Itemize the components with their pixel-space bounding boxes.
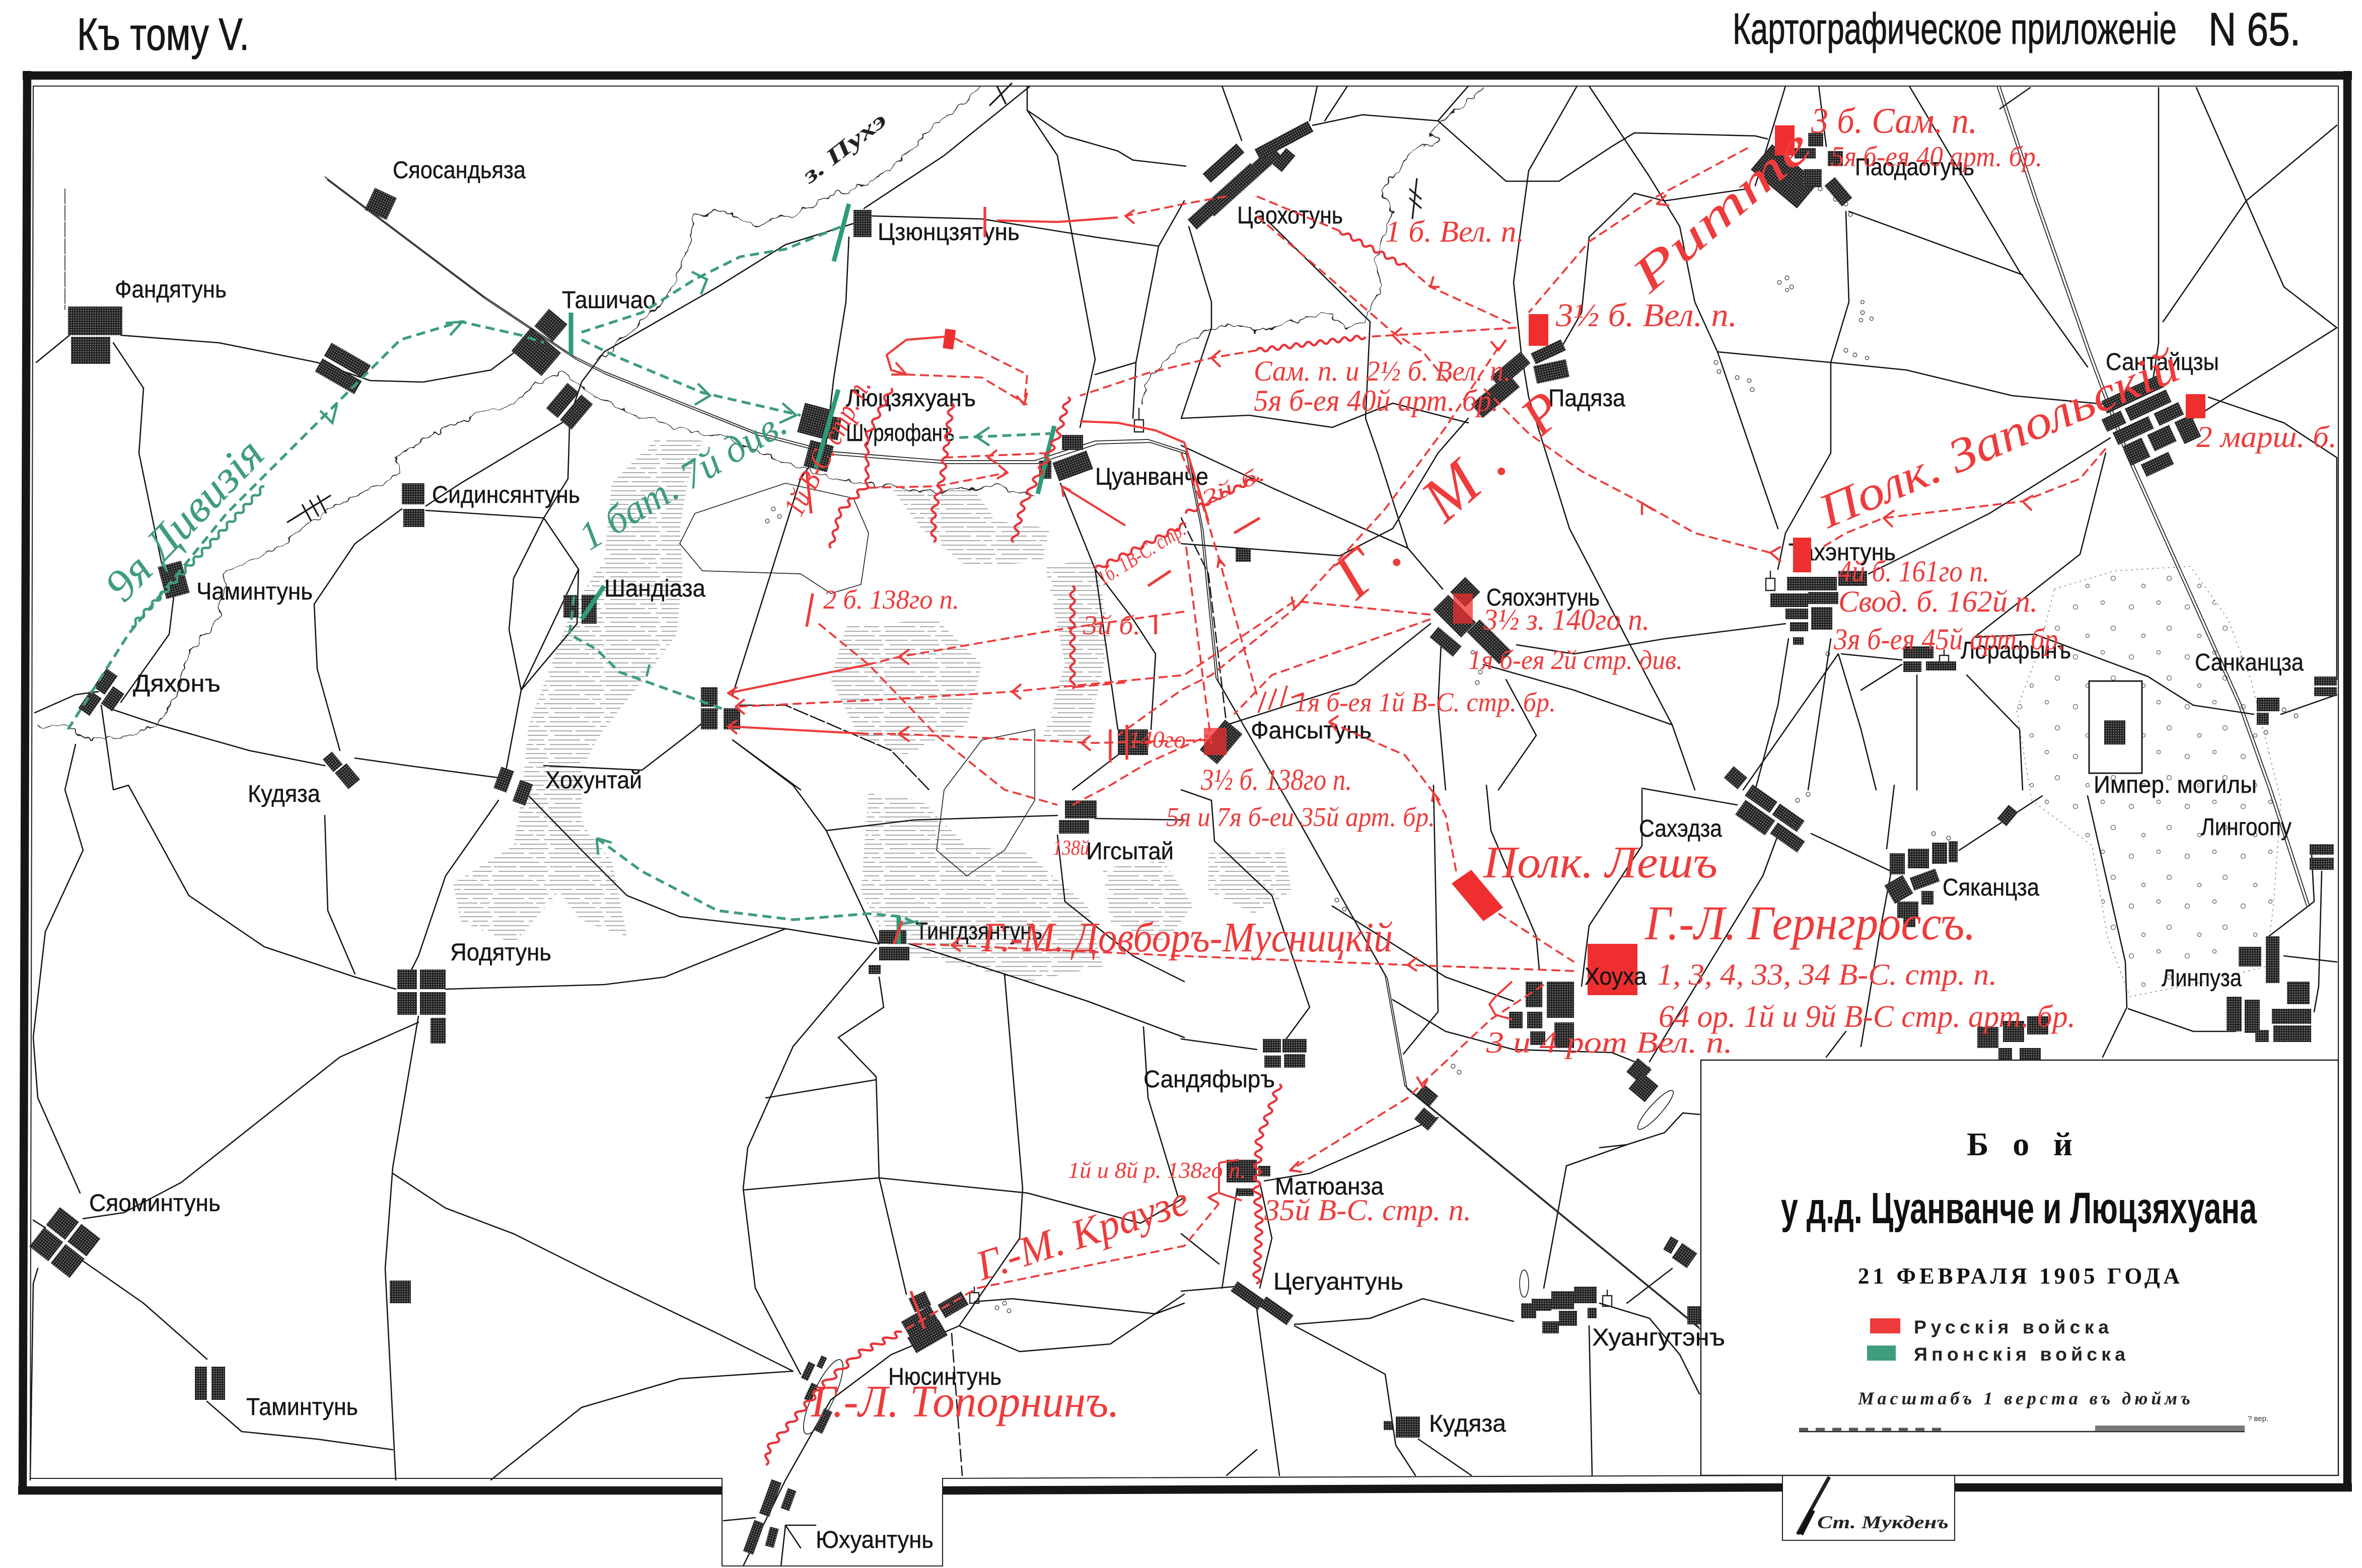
label: 1st battery 1st rifle: 1я б-ея 1й В-С. стр. бр. bbox=[1295, 687, 1556, 717]
label: 2 march bn: 2 марш. б. bbox=[2196, 420, 2337, 454]
village: Линпуза group bbox=[2227, 936, 2311, 1042]
label: 140 at hamlet: 140го bbox=[1128, 726, 1186, 753]
village: Кудяза south bbox=[1384, 1416, 1420, 1438]
japanese retreat: Хохунтай bbox=[597, 838, 921, 926]
legend swatch: russian bbox=[1870, 1318, 1900, 1333]
label: general: first part: Г. М. bbox=[1319, 425, 1520, 612]
label: col. Lesh: Полк. Лешъ bbox=[1483, 838, 1717, 887]
hill hachures bbox=[453, 438, 1292, 982]
village: Сантайцзы bbox=[2095, 369, 2207, 484]
label: 1 bn Velikoluzhsky: 1 б. Вел. п. bbox=[1385, 215, 1524, 248]
place name: Сандяфыръ bbox=[1143, 1066, 1275, 1093]
place name: Сантайцзы bbox=[2106, 349, 2219, 376]
place name: Линпуза bbox=[2162, 965, 2242, 992]
label: 3rd battery 45 art: 3я б-ея 45й арт. бр. bbox=[1833, 623, 2065, 656]
label: col. Zapolsky: Полк. Запольскій bbox=[1810, 338, 2186, 539]
village: Нюсинтунь bbox=[801, 1291, 969, 1434]
village: Цаохотунь bbox=[1188, 121, 1314, 230]
place name: Цаохотунь bbox=[1237, 202, 1343, 229]
village: central west bbox=[701, 687, 740, 729]
village: east of Сахэдза bbox=[1733, 784, 1815, 856]
japanese troop movements bbox=[68, 204, 1054, 944]
legend text: russian: Русскія войска bbox=[1914, 1316, 2109, 1337]
place name overlapping legend edge: Хуангутэнъ bbox=[1592, 1324, 1725, 1351]
village: Сяоминтунь bbox=[29, 1207, 100, 1278]
place name: Цегуантунь bbox=[1273, 1268, 1403, 1295]
lakes bbox=[680, 483, 1677, 1438]
place name: Юхуантунь bbox=[816, 1527, 934, 1553]
place name: Падяза bbox=[1548, 385, 1625, 412]
japanese advance: Цуанванче to Люцзяхуанъ bbox=[952, 433, 1054, 438]
village: Цегуантунь bbox=[1231, 1281, 1294, 1325]
village: Паодаотунь bbox=[1751, 133, 1852, 208]
place name: Тингдзянтунь bbox=[915, 918, 1042, 945]
label: gen. Krauze: Г.-М. Краузе bbox=[970, 1177, 1194, 1290]
place name: Санканцза bbox=[2195, 649, 2304, 676]
scattered tree marks bbox=[765, 187, 2298, 1313]
place name: Матюанза bbox=[1275, 1173, 1384, 1200]
village: Цзюнцзятунь bbox=[853, 210, 872, 237]
village: Сидинсянтунь bbox=[402, 483, 424, 527]
japanese advance: wavy line of 9th division bbox=[131, 486, 264, 627]
place name: Сидинсянтунь bbox=[432, 482, 580, 508]
legend swatch: japanese bbox=[1867, 1346, 1896, 1361]
village: Лорафынъ bbox=[1903, 646, 1956, 672]
icon: river flow arrows bbox=[287, 83, 1421, 522]
place name: Лингоопу bbox=[2201, 814, 2292, 841]
place name: Импер. могилы bbox=[2094, 772, 2257, 798]
russian troop movements bbox=[728, 101, 2337, 1465]
label: 35th rifle regiment: 35й В-С. стр. п. bbox=[1264, 1193, 1471, 1227]
place name: Кудяза bbox=[248, 781, 320, 807]
village: crossroads south of Ташичао bbox=[546, 383, 593, 429]
japanese line bars bbox=[571, 204, 1054, 944]
label: 138 at Игсытай: 138й bbox=[1053, 837, 1089, 860]
place name: Сяосандьяза bbox=[393, 157, 526, 184]
label: 1st battery 2nd rifle div: 1я б-ея 2й стр. див. bbox=[1468, 645, 1683, 675]
label: 2 bn near Цуанванче: 2й-б. bbox=[1198, 462, 1268, 510]
dashed routes: north-east sector bbox=[1823, 449, 2106, 547]
village: Ташичао bbox=[512, 309, 567, 376]
label: rifle regiments: 1, 3, 4, 33, 34 В-С. стр. п. bbox=[1657, 958, 1997, 991]
place name: Сяканцза bbox=[1943, 874, 2039, 901]
legend text: japanese: Японскія войска bbox=[1914, 1343, 2126, 1365]
title: date: 21 ФЕВРАЛЯ 1905 ГОДА bbox=[1858, 1263, 2180, 1289]
place name over red block: Хоуха bbox=[1585, 963, 1647, 990]
village: Санканцза bbox=[2257, 677, 2337, 725]
village: Фансытунь bbox=[1200, 720, 1242, 764]
railway to Mukden station: Ст. Мукденъ bbox=[1817, 1512, 1949, 1532]
small bars near Фансытунь bbox=[1258, 686, 1304, 713]
place name: Фансытунь bbox=[1251, 717, 1372, 744]
village: Кудяза west bbox=[323, 752, 360, 789]
imperial tomb enclosure bbox=[2089, 681, 2142, 773]
japanese advance: east to Люцзяхуанъ bbox=[582, 340, 801, 415]
label: 3rd bn: 3й б. bbox=[1083, 610, 1140, 640]
place name: Люцзяхуанъ bbox=[846, 385, 976, 412]
line bars: russian bbox=[807, 207, 1260, 1329]
village: Люцзяхуанъ bbox=[797, 403, 841, 472]
label: 5th battery 40th artillery: 5я б-ея 40 арт. бр. bbox=[1831, 141, 2042, 173]
village: centre hamlet bbox=[1118, 729, 1148, 755]
village: small near Цуанванче bbox=[1236, 548, 1251, 562]
village: Матюанза bbox=[1227, 1160, 1270, 1196]
label: consolidated bn 162: Свод. б. 162й п. bbox=[1838, 585, 2038, 618]
place name: Шуряофанъ bbox=[846, 420, 955, 446]
village: hamlet south bbox=[390, 1281, 411, 1303]
village: above legend bbox=[1977, 1016, 2048, 1060]
label: 3 bn Samara regiment: 3 б. Сам. п. bbox=[1811, 101, 1977, 141]
label: 5th battery 40th art: 5я б-ея 40й арт. бр. bbox=[1254, 384, 1498, 417]
label: 1st rifle regiment: 1й В-С. стр. п. bbox=[777, 372, 877, 521]
railway lines bbox=[325, 86, 2310, 1330]
village: Тингдзянтунь bbox=[869, 930, 909, 974]
imperial tombs wooded area bbox=[2017, 566, 2281, 997]
place name: Шандіаза bbox=[604, 575, 705, 602]
label: gen. Topornin: Г.-Л. Топорнинъ. bbox=[811, 1377, 1119, 1427]
place name: Тахэнтунь bbox=[1788, 539, 1896, 566]
place name: Ташичао bbox=[562, 287, 656, 314]
place name: Кудяза bbox=[1429, 1410, 1506, 1437]
village: Сандяфыръ bbox=[1263, 1039, 1307, 1068]
place name: Дяхонъ bbox=[133, 670, 221, 697]
skirmish lines: wavy bbox=[765, 231, 1407, 1465]
place name: Чаминтунь bbox=[196, 578, 313, 605]
village: east of Хуангутэнъ bbox=[1663, 1236, 1701, 1324]
arrows: japanese bbox=[320, 272, 989, 924]
village: Фандятунь bbox=[68, 307, 122, 364]
header: map appendix number: N 65. bbox=[2208, 3, 2301, 55]
village: Сяохэнтунь bbox=[1429, 577, 1512, 664]
japanese advance: main dashed route bbox=[68, 322, 544, 729]
village: Шандіаза bbox=[563, 595, 597, 624]
village: Игсытай bbox=[1059, 800, 1097, 834]
label: Samara regiment and 2.5 bn: Сам. п. и 2½ б. Вел. п. bbox=[1254, 355, 1511, 387]
label: 5th and 7th batteries: 5я и 7я б-еи 35й арт. бр. bbox=[1166, 802, 1435, 832]
label: 3 and 4 companies: 3 и 4 рот Вел. п. bbox=[1486, 1026, 1733, 1059]
village: Цуанванче bbox=[1039, 435, 1093, 481]
label: 3.5 bn 140 regiment: 3½ з. 140го п. bbox=[1483, 603, 1650, 636]
label: gen. Gerngross: Г.-Л. Гернгроссъ. bbox=[1644, 896, 1976, 950]
place name: Яодятунь bbox=[450, 939, 551, 966]
icon: churches bbox=[970, 408, 1949, 1306]
place name: Паодаотунь bbox=[1855, 154, 1974, 181]
place name: Хохунтай bbox=[545, 767, 642, 794]
village: small hamlets bbox=[1414, 766, 2018, 1131]
label: 1 and 8 companies: 1й и 8й р. 138го п. bbox=[1068, 1158, 1246, 1183]
village: south of Хоуха bbox=[1626, 1058, 1659, 1102]
village: Лингоопу bbox=[2310, 844, 2334, 870]
railway to Mukden station bbox=[1798, 1477, 1949, 1534]
header: volume note: Къ тому V. bbox=[77, 10, 249, 60]
japanese advance: north to Цзюнцзятунь bbox=[582, 227, 841, 332]
village: Падяза bbox=[1471, 339, 1569, 418]
place name: Фандятунь bbox=[115, 276, 227, 303]
header: map appendix number: Картографическое приложеніе bbox=[1733, 5, 2177, 53]
label: 9th division: 9я Дивизія bbox=[95, 429, 274, 611]
village: Хохунтай bbox=[493, 767, 533, 806]
village: Хоуха bbox=[1509, 982, 1574, 1048]
arrows: russian bbox=[728, 195, 2033, 1204]
panel: legend bbox=[1701, 1060, 2338, 1475]
label: general: surname: Ритте bbox=[1620, 118, 1822, 303]
village: Дяхонъ bbox=[79, 668, 124, 716]
label: 3.5 bn 138 regiment: 3½ б. 138го п. bbox=[1200, 763, 1352, 796]
solid fire lines bbox=[728, 217, 1208, 734]
village: unnamed west bbox=[315, 343, 371, 394]
label: general: dash: Р bbox=[1509, 380, 1574, 447]
label: gen. Dovbor-Musnitsky: Г.-М. Довборъ-Мусницкій bbox=[981, 914, 1393, 961]
river name: з. Пухэ bbox=[796, 107, 891, 189]
label: 64 guns: 64 ор. 1й и 9й В-С стр. арт. бр. bbox=[1659, 999, 2075, 1034]
label: 1 bn east-siberian: 1б. 1В-С. стр. bbox=[1093, 518, 1190, 590]
place name: Игсытай bbox=[1086, 838, 1174, 865]
village: Яодятунь bbox=[397, 969, 446, 1043]
place name: Лорафынъ bbox=[1961, 637, 2071, 664]
scale bar bbox=[1799, 1414, 2268, 1432]
village: Сяосандьяза bbox=[365, 188, 397, 220]
place name: Цзюнцзятунь bbox=[878, 219, 1020, 246]
label: 1 battalion 7th division: 1 бат. 7й див. bbox=[571, 401, 794, 559]
place name: Цуанванче bbox=[1095, 464, 1208, 490]
label: 3.5 bn Velikoluzhsky: 3½ б. Вел. п. bbox=[1555, 297, 1737, 334]
label: 2 bn 138 regiment: 2 б. 138го п. bbox=[823, 584, 959, 615]
village: Чаминтунь bbox=[158, 561, 190, 599]
japanese retreat: Шандіаза bbox=[569, 596, 725, 710]
russian positions: hollow bbox=[1219, 982, 1512, 1201]
title: battle: Бой bbox=[1967, 1126, 2072, 1163]
place name: Таминтунь bbox=[246, 1394, 358, 1421]
label: 4 bn 161 regiment: 4й б. 161го п. bbox=[1838, 555, 1989, 588]
village: Сяканцза bbox=[1884, 841, 1958, 927]
place name: Сяохэнтунь bbox=[1486, 584, 1600, 611]
scale bar: ? вер. bbox=[2248, 1414, 2268, 1423]
place name: Сахэдза bbox=[1639, 815, 1722, 842]
place name: Нюсинтунь bbox=[888, 1364, 1001, 1390]
russian positions: solid blocks bbox=[943, 125, 2205, 995]
scale title: Масштабъ 1 верста въ дюймъ bbox=[1857, 1388, 2190, 1408]
village: Юхуантунь bbox=[743, 1479, 797, 1555]
rivers bbox=[38, 86, 1483, 740]
village: Хуангутэнъ bbox=[1521, 1287, 1597, 1333]
village: Тахэнтунь bbox=[1770, 571, 1867, 645]
place name: Сяоминтунь bbox=[89, 1190, 221, 1217]
village: Таминтунь bbox=[195, 1367, 225, 1400]
